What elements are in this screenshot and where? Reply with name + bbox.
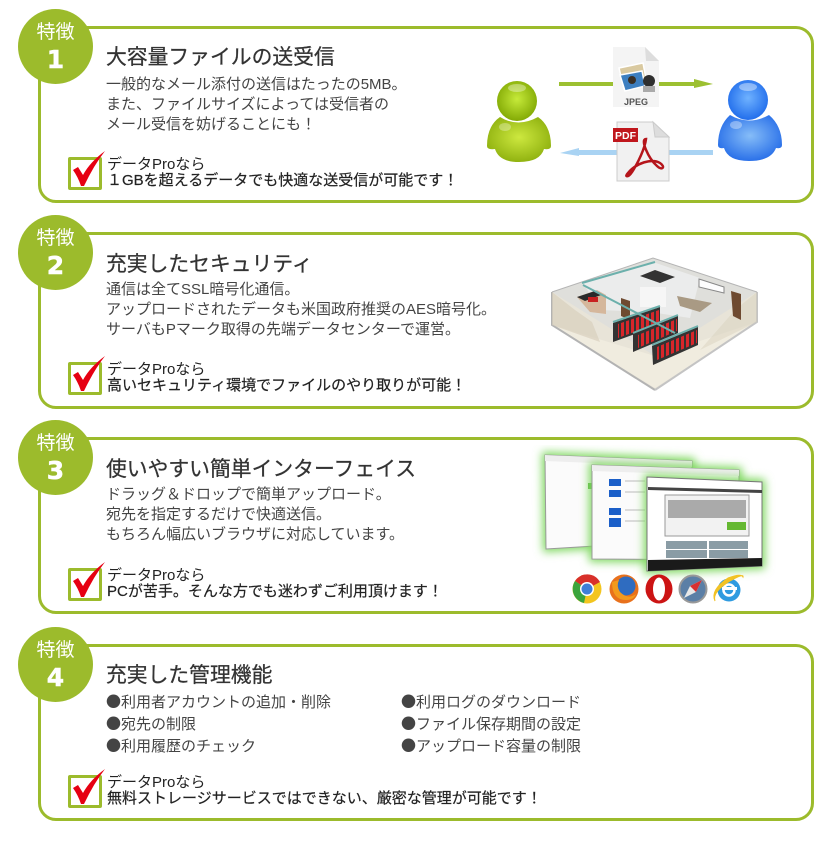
text block: feature 4 list left: [106, 691, 331, 756]
screenshot: management menu: [592, 465, 739, 560]
callout: feature 3 benefit: データProなら: [107, 567, 205, 584]
callout: feature 1 benefit: １GBを超えるデータでも快適な送受信が可能です！: [107, 172, 458, 189]
server rack rows: [613, 307, 698, 365]
heading: feature 4: 充実した管理機能: [106, 664, 272, 687]
diagram: file exchange between two users: [487, 47, 782, 182]
callout: feature 4 benefit: 無料ストレージサービスではできない、厳密な管理が可能です！: [107, 790, 542, 807]
icon: blue user: [718, 80, 782, 161]
icon: Opera: [646, 574, 672, 604]
panel: feature 1: [38, 26, 814, 203]
back rooms: [577, 262, 741, 320]
callout: feature 3 benefit: PCが苦手。そんな方でも迷わずご利用頂けます！: [107, 583, 443, 600]
callout: feature 4 benefit: データProなら: [107, 774, 205, 791]
text block: feature 4 list right: [401, 691, 581, 756]
text block: feature 1 description: 一般的なメール添付の送信はたったの5MB。: [106, 76, 407, 93]
icon: Internet Explorer: [714, 575, 743, 602]
screenshot: upload page: [647, 477, 762, 571]
text block: feature 2 description: アップロードされたデータも米国政府推奨のAES暗号化。: [106, 301, 496, 318]
icon: green user: [487, 81, 551, 162]
text block: feature 4 list left: ●利用履歴のチェック: [106, 735, 256, 756]
text block: feature 4 list left: ●宛先の制限: [106, 713, 196, 734]
text block: feature 1 description: メール受信を妨げることにも！: [106, 116, 316, 133]
badge: feature 2: 2: [47, 251, 64, 280]
badge: feature 1: 1: [47, 45, 64, 74]
text block: feature 1 description: [106, 76, 407, 133]
screenshot: login: [545, 455, 692, 549]
badge: feature 3: 特徴: [36, 433, 74, 454]
text block: feature 4 list right: ●利用ログのダウンロード: [401, 691, 581, 712]
arrow: green to the right: [559, 79, 713, 88]
illustration: interface screenshots and browser icons: [535, 445, 772, 604]
floor and walls: [552, 258, 757, 390]
text block: feature 3 description: [106, 486, 404, 543]
text block: feature 2 description: サーバもPマーク取得の先端データセンターで運営。: [106, 321, 460, 338]
icon: Safari: [680, 576, 706, 602]
icon: Chrome: [572, 574, 602, 604]
icon: PDF file: PDF: [615, 130, 637, 142]
badge: feature 1: [18, 9, 93, 84]
callout: feature 2 benefit: データProなら: [107, 361, 205, 378]
network ducts: [582, 262, 698, 345]
icon: PDF file: [613, 122, 669, 181]
panel: feature 3: [38, 437, 814, 614]
icon: JPEG file: [613, 47, 659, 107]
callout: feature 4 benefit: [68, 769, 542, 808]
arrow: blue to the left: [560, 148, 713, 156]
badge: feature 1: 特徴: [36, 22, 74, 43]
badge: feature 2: [18, 215, 93, 290]
panel: feature 4: [38, 644, 814, 821]
panel: feature 2: [38, 232, 814, 409]
icon: JPEG file: JPEG: [624, 97, 648, 107]
text block: feature 2 description: [106, 281, 496, 338]
text block: feature 4 list right: ●アップロード容量の制限: [401, 735, 581, 756]
callout: feature 2 benefit: 高いセキュリティ環境でファイルのやり取りが可能！: [107, 377, 466, 394]
heading: feature 2: 充実したセキュリティ: [106, 253, 313, 276]
text block: feature 3 description: ドラッグ＆ドロップで簡単アップロード。: [106, 486, 391, 503]
text block: feature 3 description: もちろん幅広いブラウザに対応しています。: [106, 526, 404, 543]
text block: feature 4 list left: ●利用者アカウントの追加・削除: [106, 691, 331, 712]
heading: feature 1: 大容量ファイルの送受信: [106, 46, 335, 69]
text block: feature 4 list right: ●ファイル保存期間の設定: [401, 713, 581, 734]
illustration: data center cutaway: [551, 258, 758, 391]
text block: feature 3 description: 宛先を指定するだけで快適送信。: [106, 506, 331, 523]
badge: feature 2: 特徴: [36, 228, 74, 249]
callout: feature 1 benefit: [68, 151, 458, 190]
callout: feature 3 benefit: [68, 562, 443, 601]
icon: Firefox: [610, 574, 638, 604]
heading: feature 3: 使いやすい簡単インターフェイス: [106, 458, 416, 481]
badge: feature 3: [18, 420, 93, 495]
text block: feature 1 description: また、ファイルサイズによっては受信者の: [106, 96, 389, 113]
badge: feature 4: 特徴: [36, 640, 74, 661]
callout: feature 2 benefit: [68, 356, 466, 395]
text block: feature 2 description: 通信は全てSSL暗号化通信。: [106, 281, 299, 298]
badge: feature 4: 4: [47, 663, 64, 692]
callout: feature 1 benefit: データProなら: [107, 156, 205, 173]
badge: feature 4: [18, 627, 93, 702]
badge: feature 3: 3: [47, 456, 64, 485]
